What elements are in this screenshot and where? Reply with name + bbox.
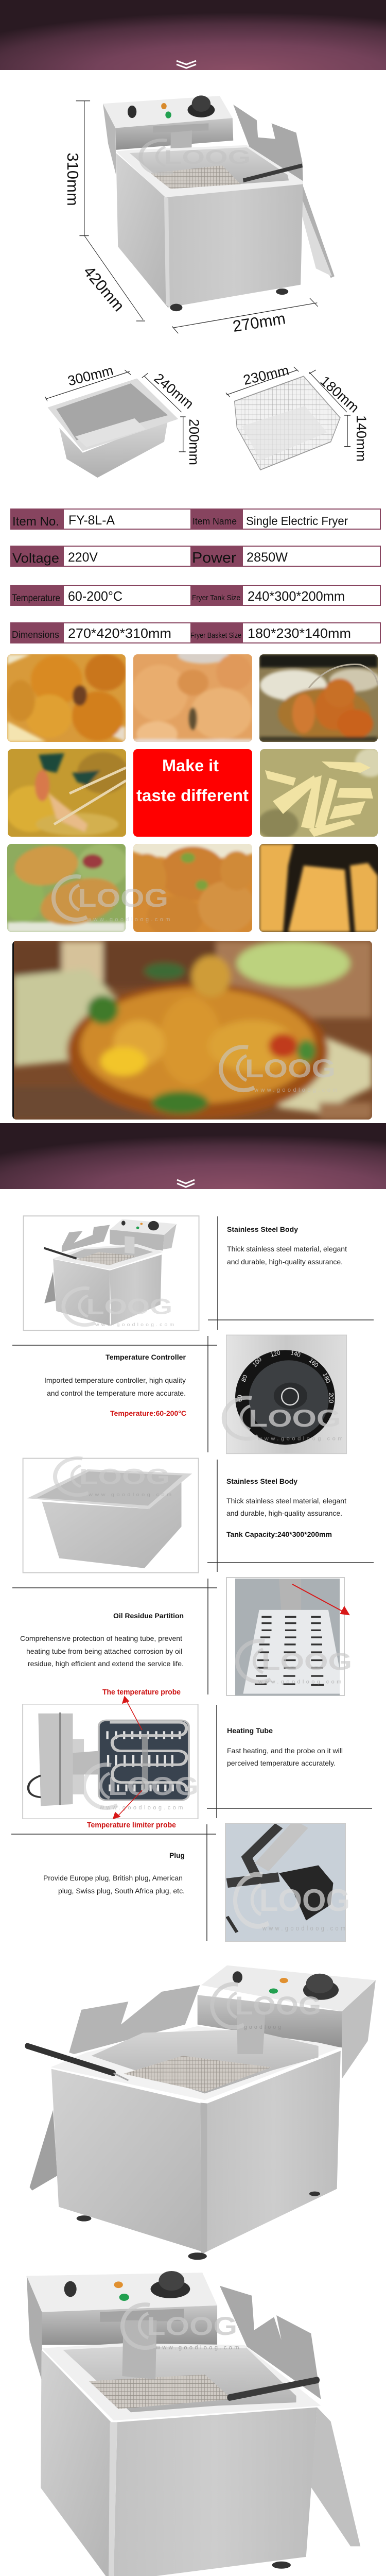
spec row: dimensions: 270*420*310mm: [68, 625, 171, 641]
feature text: heating tube: Fast heating, and the probe on it will: [227, 1747, 343, 1755]
photo: shrimp tempura in oil: [5, 749, 129, 837]
dimension label: 200mm: 200mm: [186, 419, 202, 465]
feature image: temperature knob: 200: [327, 1393, 335, 1403]
feature text: tank: [207, 1460, 374, 1572]
watermark: plug: www.goodloog.com: [262, 1924, 348, 1932]
feature text: oil residue partition: Oil Residue Partition: [113, 1612, 184, 1620]
dimension label: 240mm: 240mm: [151, 370, 197, 412]
feature image: temperature knob: 180: [321, 1371, 332, 1384]
spec row: temperature: [11, 585, 380, 605]
feature image: temperature knob: 60: [236, 1395, 243, 1402]
feature image: temperature knob: 100: [251, 1355, 263, 1368]
top banner: [0, 0, 386, 70]
watermark: heating tube: www.goodloog.com: [99, 1805, 185, 1811]
feature image: stainless tank: [23, 1459, 199, 1573]
feature image: plug: [225, 1823, 345, 1941]
spec row: dimensions: Fryer Basket Size: [190, 631, 241, 640]
second banner: [0, 1123, 386, 1189]
feature text: oil residue partition: [12, 1579, 217, 1694]
spec row: item: FY-8L-A: [68, 513, 115, 528]
feature text: tank: Tank Capacity:240*300*200mm: [226, 1530, 332, 1538]
photo: fries in oil: [260, 749, 378, 837]
spec row: voltage: 220V: [68, 550, 98, 565]
watermark: fried chicken plate: www.goodloog.com: [254, 1087, 340, 1093]
photo: fried dough sticks: [259, 844, 378, 932]
watermark: food photo grid: LOOG: [78, 884, 168, 912]
dimension label: 140mm: 140mm: [354, 415, 369, 462]
feature text: temperature controller: and control the temperature more accurate.: [47, 1389, 186, 1397]
fryer tank with dimensions: [45, 370, 186, 478]
feature text: heating tube: [207, 1705, 372, 1818]
photo: fried ribs: [6, 654, 126, 742]
watermark: fried chicken plate: LOOG: [245, 1054, 336, 1083]
watermark: heating tube: [84, 1765, 199, 1811]
dimension label: 420mm: 420mm: [80, 262, 128, 315]
feature image: temperature knob: 80: [240, 1374, 249, 1383]
feature text: stainless steel body: Thick stainless steel material, elegant: [227, 1245, 347, 1253]
feature text: stainless steel body: Stainless Steel Body: [227, 1225, 298, 1233]
watermark: food photo grid: [54, 876, 172, 923]
watermark: heating tube: LOOG: [108, 1772, 199, 1801]
photo: chicken in frying oil: [259, 654, 381, 742]
watermark: tank image: [55, 1458, 174, 1498]
spec row: voltage: [11, 546, 380, 566]
feature text: temperature controller: Temperature:60-200°C: [110, 1409, 186, 1417]
photo: breaded cutlets: [3, 842, 129, 933]
watermark: tank image: www.goodloog.com: [88, 1493, 174, 1498]
label: the temperature probe: The temperature probe: [102, 1688, 181, 1697]
watermark: left view fryer: LOOG: [235, 1992, 321, 2020]
spec row: voltage: Power: [192, 550, 236, 566]
feature text: stainless steel body: [208, 1216, 374, 1330]
watermark: left view fryer: [212, 1984, 321, 2030]
watermark: feature image 1: [63, 1288, 176, 1328]
icon: double chevron: [177, 61, 196, 68]
watermark: fried chicken plate: [221, 1047, 340, 1093]
310mm dimension line: [76, 101, 318, 333]
arrow: probe pointer: [122, 1697, 142, 1730]
callout: make it taste different: [133, 749, 252, 837]
feature text: plug: Provide Europe plug, British plug, American: [43, 1874, 183, 1882]
product photo: fryer right view: [27, 2271, 360, 2576]
spec row: dimensions: 180*230*140mm: [248, 625, 351, 641]
watermark: knob: LOOG: [249, 1404, 341, 1432]
feature image: temperature knob: 160: [308, 1357, 320, 1369]
watermark: right view fryer: LOOG: [147, 2312, 237, 2341]
spec row: temperature: Temperature: [12, 593, 60, 604]
product photo: fryer left view: [27, 1965, 376, 2260]
watermark: knob: www.goodloog.com: [257, 1436, 345, 1442]
spec row: item: [11, 509, 380, 529]
feature text: tank: and durable, high-quality assurance.: [226, 1509, 342, 1517]
spec row: item: Item Name: [192, 516, 237, 527]
watermark: right view fryer: www.goodloog.com: [155, 2345, 241, 2351]
feature text: plug: plug, Swiss plug, South Africa plug, etc.: [58, 1887, 185, 1895]
feature text: heating tube: Heating Tube: [227, 1726, 273, 1735]
dimension label: 270mm: 270mm: [232, 309, 287, 335]
spec row: dimensions: Dimensions: [12, 630, 59, 640]
watermark: main fryer: [141, 140, 251, 174]
watermark: food photo grid: www.goodloog.com: [86, 917, 172, 923]
watermark: oil partition: LOOG: [261, 1648, 352, 1675]
photo: fried balls: [133, 844, 252, 932]
feature text: stainless steel body: and durable, high-quality assurance.: [227, 1258, 343, 1266]
spec row: temperature: 240*300*200mm: [248, 588, 345, 604]
feature text: oil residue partition: heating tube from being attached corrosion by oil: [26, 1647, 182, 1655]
spec row: temperature: Fryer Tank Size: [192, 594, 240, 602]
spec row: item: Item No.: [12, 515, 59, 529]
watermark: knob: [224, 1398, 345, 1442]
feature text: oil residue partition: Comprehensive protection of heating tube, prevent: [20, 1634, 182, 1642]
watermark: plug: [235, 1874, 350, 1932]
spec row: voltage: 2850W: [247, 550, 288, 565]
feature text: plug: [11, 1824, 216, 1941]
dimension label: 300mm: 300mm: [66, 363, 115, 389]
feature text: heating tube: perceived temperature accurately.: [227, 1759, 336, 1767]
photo: crispy chicken: [133, 654, 252, 742]
dimension label: 310mm: 310mm: [64, 152, 82, 206]
spec row: voltage: Voltage: [12, 550, 59, 566]
callout: make it taste different: taste different: [136, 786, 249, 805]
watermark: feature image 1: www.goodloog.com: [95, 1323, 176, 1328]
dimension label: 180mm: 180mm: [318, 373, 362, 416]
icon: double chevron: [177, 1180, 195, 1187]
feature text: temperature controller: [12, 1336, 217, 1452]
feature image: temperature knob: 140: [290, 1349, 302, 1359]
photo: fried chicken plate: [12, 940, 372, 1120]
callout: make it taste different: Make it: [162, 756, 219, 775]
feature: stainless steel body image: [24, 1216, 199, 1330]
feature text: temperature controller: Temperature Controller: [106, 1353, 186, 1361]
feature text: oil residue partition: residue, high efficient and extend the service life.: [28, 1659, 184, 1668]
spec row: item: Single Electric Fryer: [246, 514, 348, 528]
feature image: oil partition plate: [226, 1578, 349, 1696]
watermark: tank image: LOOG: [79, 1464, 170, 1489]
arrow: limiter probe pointer: [113, 1790, 142, 1819]
watermark: right view fryer: [122, 2304, 241, 2351]
main fryer with dimensions: [76, 95, 335, 333]
watermark: feature image 1: LOOG: [86, 1294, 172, 1319]
watermark: oil partition: www.goodloog.com: [258, 1679, 344, 1685]
watermark: left view fryer: goodloog: [244, 2024, 283, 2030]
watermark: oil partition: [237, 1641, 352, 1685]
feature image: heating tube: [23, 1704, 198, 1819]
feature image: temperature knob: 120: [270, 1349, 281, 1359]
feature image: temperature knob: [226, 1335, 346, 1453]
spec row: dimensions: [11, 623, 380, 643]
feature text: tank: Stainless Steel Body: [226, 1477, 297, 1485]
label: temperature limiter probe: Temperature limiter probe: [87, 1821, 176, 1829]
feature text: tank: Thick stainless steel material, elegant: [226, 1497, 346, 1505]
spec table: [11, 509, 380, 643]
spec row: temperature: 60-200°C: [68, 588, 122, 604]
fryer basket with dimensions: [226, 367, 350, 470]
watermark: main fryer: LOOG: [164, 146, 251, 168]
feature text: temperature controller: Imported temperature controller, high quality: [44, 1376, 186, 1384]
dimension label: 230mm: 230mm: [242, 362, 290, 388]
feature text: plug: Plug: [169, 1851, 185, 1859]
arrow: red pointer: [292, 1584, 349, 1615]
watermark: plug: LOOG: [259, 1883, 350, 1918]
